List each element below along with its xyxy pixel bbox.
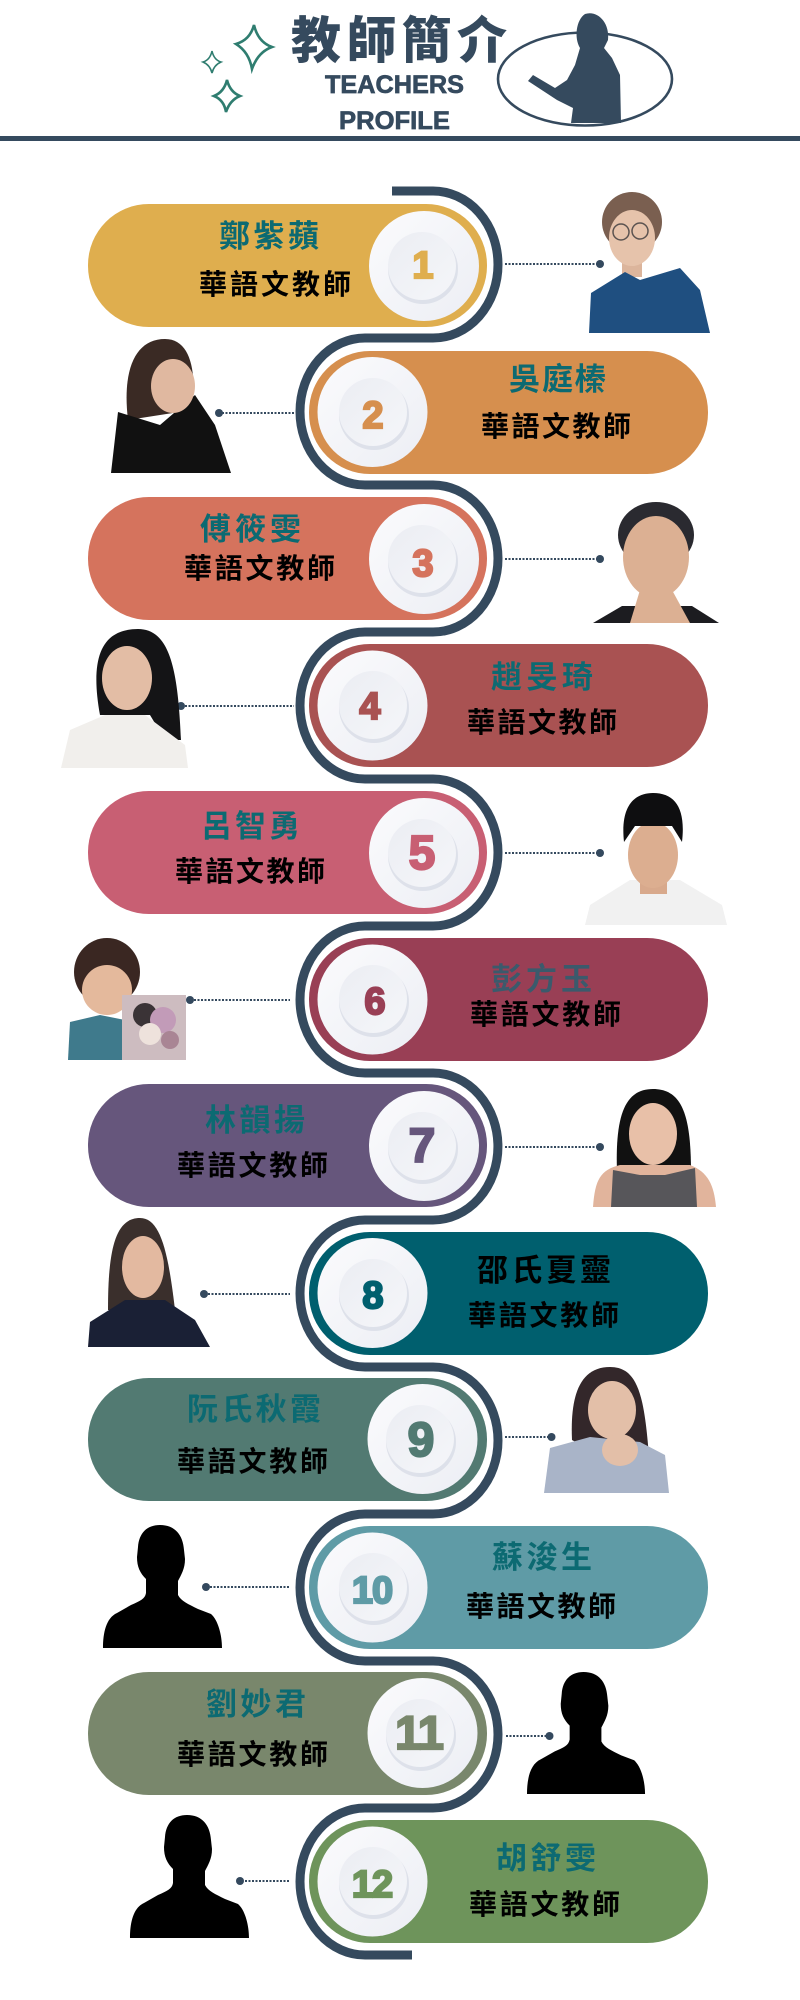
dotted leader bbox=[215, 409, 294, 417]
portrait bbox=[68, 938, 186, 1060]
number badge 11 bbox=[368, 1678, 478, 1788]
portrait bbox=[61, 629, 188, 768]
role: 華語文教師 bbox=[468, 1300, 619, 1331]
name: 蘇浚生 bbox=[492, 1540, 592, 1575]
number badge 12 bbox=[318, 1826, 428, 1936]
number badge 12: 12 bbox=[352, 1864, 392, 1906]
teacher 9 bbox=[177, 1367, 669, 1494]
number badge 8 bbox=[318, 1238, 428, 1348]
name: 邵氏夏靈 bbox=[477, 1253, 611, 1288]
teacher 12 pill bbox=[309, 1820, 708, 1943]
number badge 6: 6 bbox=[364, 981, 386, 1023]
name: 趙旻琦 bbox=[491, 660, 593, 695]
silhouette portrait bbox=[103, 1525, 222, 1648]
teacher 7 bbox=[177, 1089, 716, 1207]
teacher 5 bbox=[175, 793, 727, 925]
teacher 2 pill bbox=[309, 351, 708, 474]
portrait bbox=[593, 502, 719, 623]
number badge 2 bbox=[318, 357, 428, 467]
number badge 10: 10 bbox=[352, 1570, 392, 1612]
name: 劉妙君 bbox=[206, 1687, 306, 1722]
number badge 3 bbox=[369, 504, 479, 614]
teacher 7 pill bbox=[88, 1084, 487, 1207]
header rule bbox=[0, 136, 800, 141]
portrait bbox=[593, 1089, 716, 1207]
teacher 10 bbox=[103, 1525, 616, 1648]
name: 呂智勇 bbox=[201, 809, 300, 844]
teacher 8 bbox=[88, 1218, 619, 1348]
number badge 7: 7 bbox=[409, 1120, 435, 1173]
dotted leader bbox=[506, 1732, 554, 1740]
name: 鄭紫蘋 bbox=[219, 219, 319, 254]
portrait bbox=[589, 192, 710, 333]
subtitle: teachers: TEACHERS bbox=[325, 71, 464, 99]
number badge 1: 1 bbox=[412, 245, 434, 287]
teacher 4 pill bbox=[309, 644, 708, 767]
dotted leader bbox=[186, 996, 290, 1004]
role: 華語文教師 bbox=[177, 1446, 328, 1477]
teacher 6 bbox=[68, 938, 621, 1060]
portrait bbox=[585, 793, 727, 925]
name: 林韻揚 bbox=[205, 1103, 305, 1138]
role: 華語文教師 bbox=[470, 999, 621, 1030]
number badge 4 bbox=[318, 650, 428, 760]
teacher 11 bbox=[177, 1672, 645, 1794]
teacher 5 pill bbox=[88, 791, 487, 914]
number badge 11: 11 bbox=[395, 1706, 443, 1759]
teacher 11 pill bbox=[88, 1672, 487, 1795]
number badge 9 bbox=[368, 1384, 478, 1494]
dotted leader bbox=[200, 1290, 290, 1298]
number badge 9: 9 bbox=[408, 1414, 434, 1467]
dotted leader bbox=[202, 1583, 290, 1591]
portrait bbox=[111, 339, 231, 473]
number badge 8: 8 bbox=[362, 1275, 384, 1317]
role: 華語文教師 bbox=[177, 1739, 328, 1770]
dotted leader bbox=[505, 260, 604, 268]
name: 胡舒雯 bbox=[496, 1841, 596, 1876]
number badge 7 bbox=[369, 1091, 479, 1201]
name: 傅筱雯 bbox=[200, 512, 301, 547]
teacher 3 bbox=[184, 502, 719, 623]
teacher 8 pill bbox=[309, 1232, 708, 1355]
role: 華語文教師 bbox=[466, 1591, 616, 1622]
dotted leader bbox=[505, 849, 604, 857]
number badge 6 bbox=[318, 944, 428, 1054]
role: 華語文教師 bbox=[481, 411, 631, 442]
teacher 6 pill bbox=[309, 938, 708, 1061]
name: 阮氏秋霞 bbox=[187, 1392, 321, 1427]
number badge 4: 4 bbox=[359, 686, 381, 728]
number badge 5 bbox=[369, 798, 479, 908]
role: 華語文教師 bbox=[177, 1150, 328, 1181]
dotted leader bbox=[236, 1877, 290, 1885]
icon: sparkles bbox=[203, 25, 272, 112]
portrait bbox=[544, 1367, 669, 1493]
teacher 9 pill bbox=[88, 1378, 487, 1501]
role: 華語文教師 bbox=[199, 269, 351, 300]
number badge 2: 2 bbox=[362, 395, 384, 437]
serpentine connector bbox=[300, 191, 498, 1955]
teacher 3 pill bbox=[88, 497, 487, 620]
role: 華語文教師 bbox=[467, 707, 617, 738]
silhouette portrait bbox=[527, 1672, 645, 1794]
title: 教師簡介 bbox=[291, 13, 507, 69]
dotted leader bbox=[177, 702, 294, 710]
teacher 1 bbox=[199, 192, 710, 333]
number badge 3: 3 bbox=[412, 543, 434, 585]
header bbox=[203, 13, 672, 135]
teacher 1 pill bbox=[88, 204, 487, 327]
number badge 5: 5 bbox=[409, 827, 435, 880]
portrait bbox=[88, 1218, 210, 1347]
teacher 10 pill bbox=[309, 1526, 708, 1649]
subtitle: profile: PROFILE bbox=[339, 107, 450, 135]
number badge 1 bbox=[369, 211, 479, 321]
teacher 12 bbox=[130, 1815, 620, 1938]
teacher 4 bbox=[61, 629, 617, 768]
role: 華語文教師 bbox=[469, 1889, 620, 1920]
number badge 10 bbox=[318, 1532, 428, 1642]
icon: teacher silhouette in ellipse bbox=[498, 13, 672, 126]
role: 華語文教師 bbox=[184, 553, 335, 584]
dotted leader bbox=[505, 555, 604, 563]
dotted leader bbox=[505, 1433, 556, 1441]
teacher 2 bbox=[111, 339, 631, 473]
dotted leader bbox=[505, 1143, 604, 1151]
role: 華語文教師 bbox=[175, 856, 325, 887]
name: 彭方玉 bbox=[491, 962, 592, 997]
name: 吳庭榛 bbox=[509, 362, 606, 397]
silhouette portrait bbox=[130, 1815, 249, 1938]
